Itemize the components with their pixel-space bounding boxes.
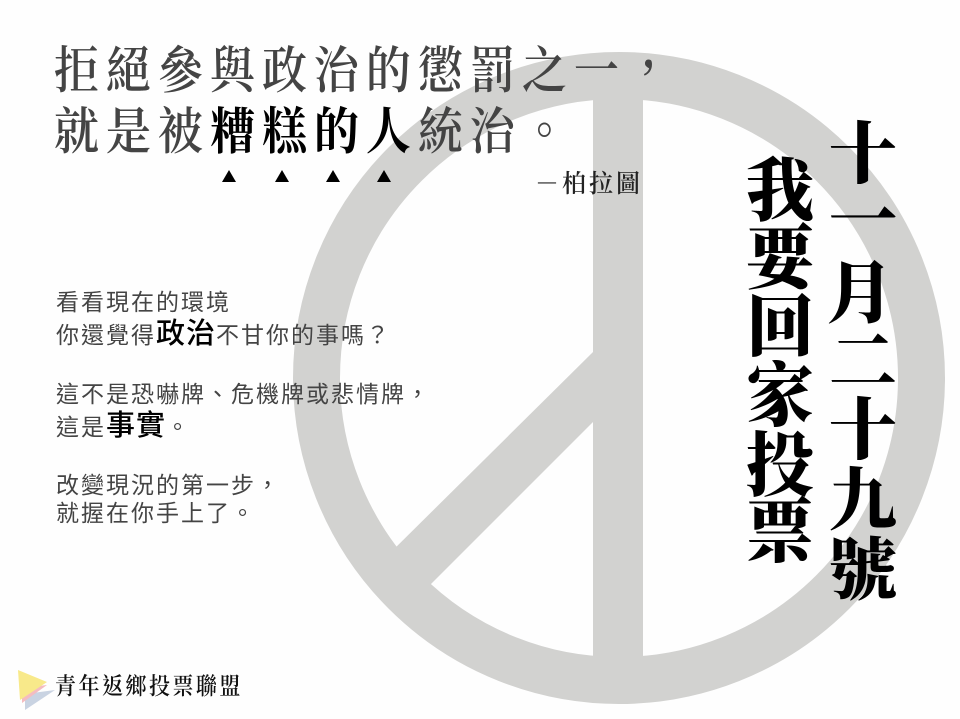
vertical headline: date: 九: [829, 463, 897, 539]
text block: look at the environment: 看看現在的環境: [56, 289, 231, 315]
vertical headline: date: 號: [829, 533, 897, 609]
title line 2: 就是被糟糕的人統治。: [54, 105, 574, 161]
emphasis triangle markers: [222, 170, 391, 182]
title line 1: 拒絕參與政治的懲罰之一，: [54, 44, 678, 100]
vertical headline: I will go home to vote: 要: [746, 220, 818, 298]
text block: first step: [56, 472, 281, 526]
vertical headline: I will go home to vote: 家: [746, 357, 814, 435]
icon: layered triangles: [18, 670, 55, 710]
vertical headline: date: 二: [829, 325, 897, 401]
icon: grey peace symbol background: [316, 76, 922, 680]
text block: this is fact: 這不是恐嚇牌、危機牌或悲情牌，: [56, 381, 431, 407]
vertical headline: date: 一: [829, 183, 897, 259]
text block: first step: 改變現況的第一步，: [56, 472, 281, 498]
vertical headline: date: 月: [826, 256, 894, 332]
vertical headline: I will go home to vote: [746, 152, 818, 571]
text block: first step: 就握在你手上了。: [56, 500, 256, 526]
text block: this is fact: 這是事實。: [56, 409, 191, 442]
vertical headline: date: [826, 117, 897, 609]
vertical headline: I will go home to vote: 我: [746, 152, 814, 230]
vertical headline: I will go home to vote: 票: [746, 493, 814, 571]
organization name: 青年返鄉投票聯盟: [55, 673, 243, 699]
text block: this is fact: [56, 381, 431, 442]
vertical headline: date: 十: [829, 393, 897, 469]
vertical headline: I will go home to vote: 投: [746, 427, 814, 505]
text block: look at the environment: [56, 289, 391, 350]
text block: look at the environment: 你還覺得政治不甘你的事嗎？: [56, 317, 391, 350]
logo: youth vote alliance: [18, 670, 243, 710]
vertical headline: I will go home to vote: 回: [746, 288, 814, 366]
vertical headline: date: 十: [829, 117, 897, 193]
title: Plato quote: [54, 44, 678, 161]
quote attribution: －柏拉圖: [535, 169, 643, 198]
